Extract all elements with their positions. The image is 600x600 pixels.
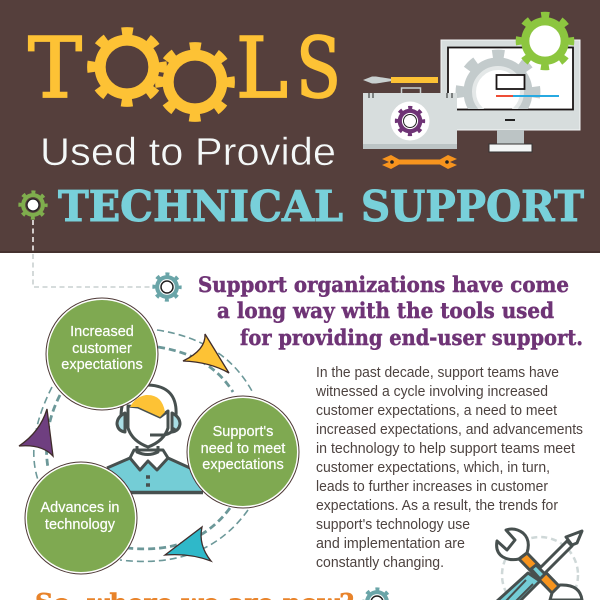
node: increased customer expectations: Increased xyxy=(70,324,134,340)
title: TOOLS: T xyxy=(28,20,82,117)
paragraph: witnessed a cycle involving increased xyxy=(315,384,548,400)
green gear xyxy=(519,15,571,67)
arrow: yellow xyxy=(183,334,229,373)
face xyxy=(128,406,168,447)
title: technical support: SUPPORT xyxy=(361,182,584,231)
hair xyxy=(130,395,165,417)
node: increased customer expectations xyxy=(46,298,158,410)
paragraph: expectations. As a result, the trends for xyxy=(316,498,558,514)
earmuffs xyxy=(117,413,125,432)
paragraph: constantly changing. xyxy=(316,555,444,571)
paragraph: customer expectations, which, in turn, xyxy=(316,460,550,476)
node: advances in technology xyxy=(25,462,137,574)
paragraph: in technology to help support teams meet xyxy=(316,441,575,457)
wrench xyxy=(497,529,582,600)
paragraph: increased expectations, and advancements xyxy=(316,422,583,438)
illustration: computer with tools xyxy=(363,15,580,169)
node: increased customer expectations: customer xyxy=(72,341,132,357)
icon: wrench and screwdriver xyxy=(496,529,582,600)
paragraph: leads to further increases in customer xyxy=(316,479,548,495)
paragraph: and implementation are xyxy=(316,536,465,552)
headband xyxy=(121,385,176,416)
node: support's need: Support's xyxy=(213,424,273,440)
node: support's need: need to meet xyxy=(201,441,285,457)
wrench xyxy=(382,155,457,169)
paragraph: In the past decade, support teams have xyxy=(316,365,559,381)
body xyxy=(107,458,202,492)
header band xyxy=(0,0,600,253)
icon: section gear xyxy=(364,589,390,600)
title: technical support: TECHNICAL xyxy=(58,182,343,231)
node: support's need xyxy=(187,396,299,508)
heading: Support organizations have come xyxy=(198,273,569,298)
title: technical support xyxy=(58,182,584,231)
paragraph: customer expectations, a need to meet xyxy=(316,403,557,419)
icon: green gear node xyxy=(20,192,46,218)
microphone xyxy=(150,428,175,435)
heading xyxy=(198,273,583,351)
node: increased customer expectations: expectations xyxy=(61,357,143,373)
agent illustration xyxy=(107,385,203,492)
title: TOOLS: L xyxy=(236,20,288,117)
node: advances in technology: technology xyxy=(45,517,116,533)
paragraph xyxy=(315,365,583,571)
title: TOOLS xyxy=(28,20,341,118)
dashed connector xyxy=(33,220,152,287)
icon: teal gear node xyxy=(154,274,180,300)
arrow: blue xyxy=(165,527,211,561)
screwdriver xyxy=(363,76,438,84)
heading: a long way with the tools used xyxy=(217,299,554,324)
paragraph: support's technology use xyxy=(316,517,470,533)
node: advances in technology: Advances in xyxy=(40,500,120,516)
screwdriver xyxy=(496,531,582,600)
cycle: dashed arcs xyxy=(34,330,253,561)
toolbox xyxy=(363,88,457,149)
node: support's need: expectations xyxy=(202,457,284,473)
title: TOOLS: S xyxy=(296,20,341,117)
arrow: purple xyxy=(19,409,53,456)
subtitle: Used to Provide xyxy=(40,131,336,174)
monitor xyxy=(441,40,580,152)
